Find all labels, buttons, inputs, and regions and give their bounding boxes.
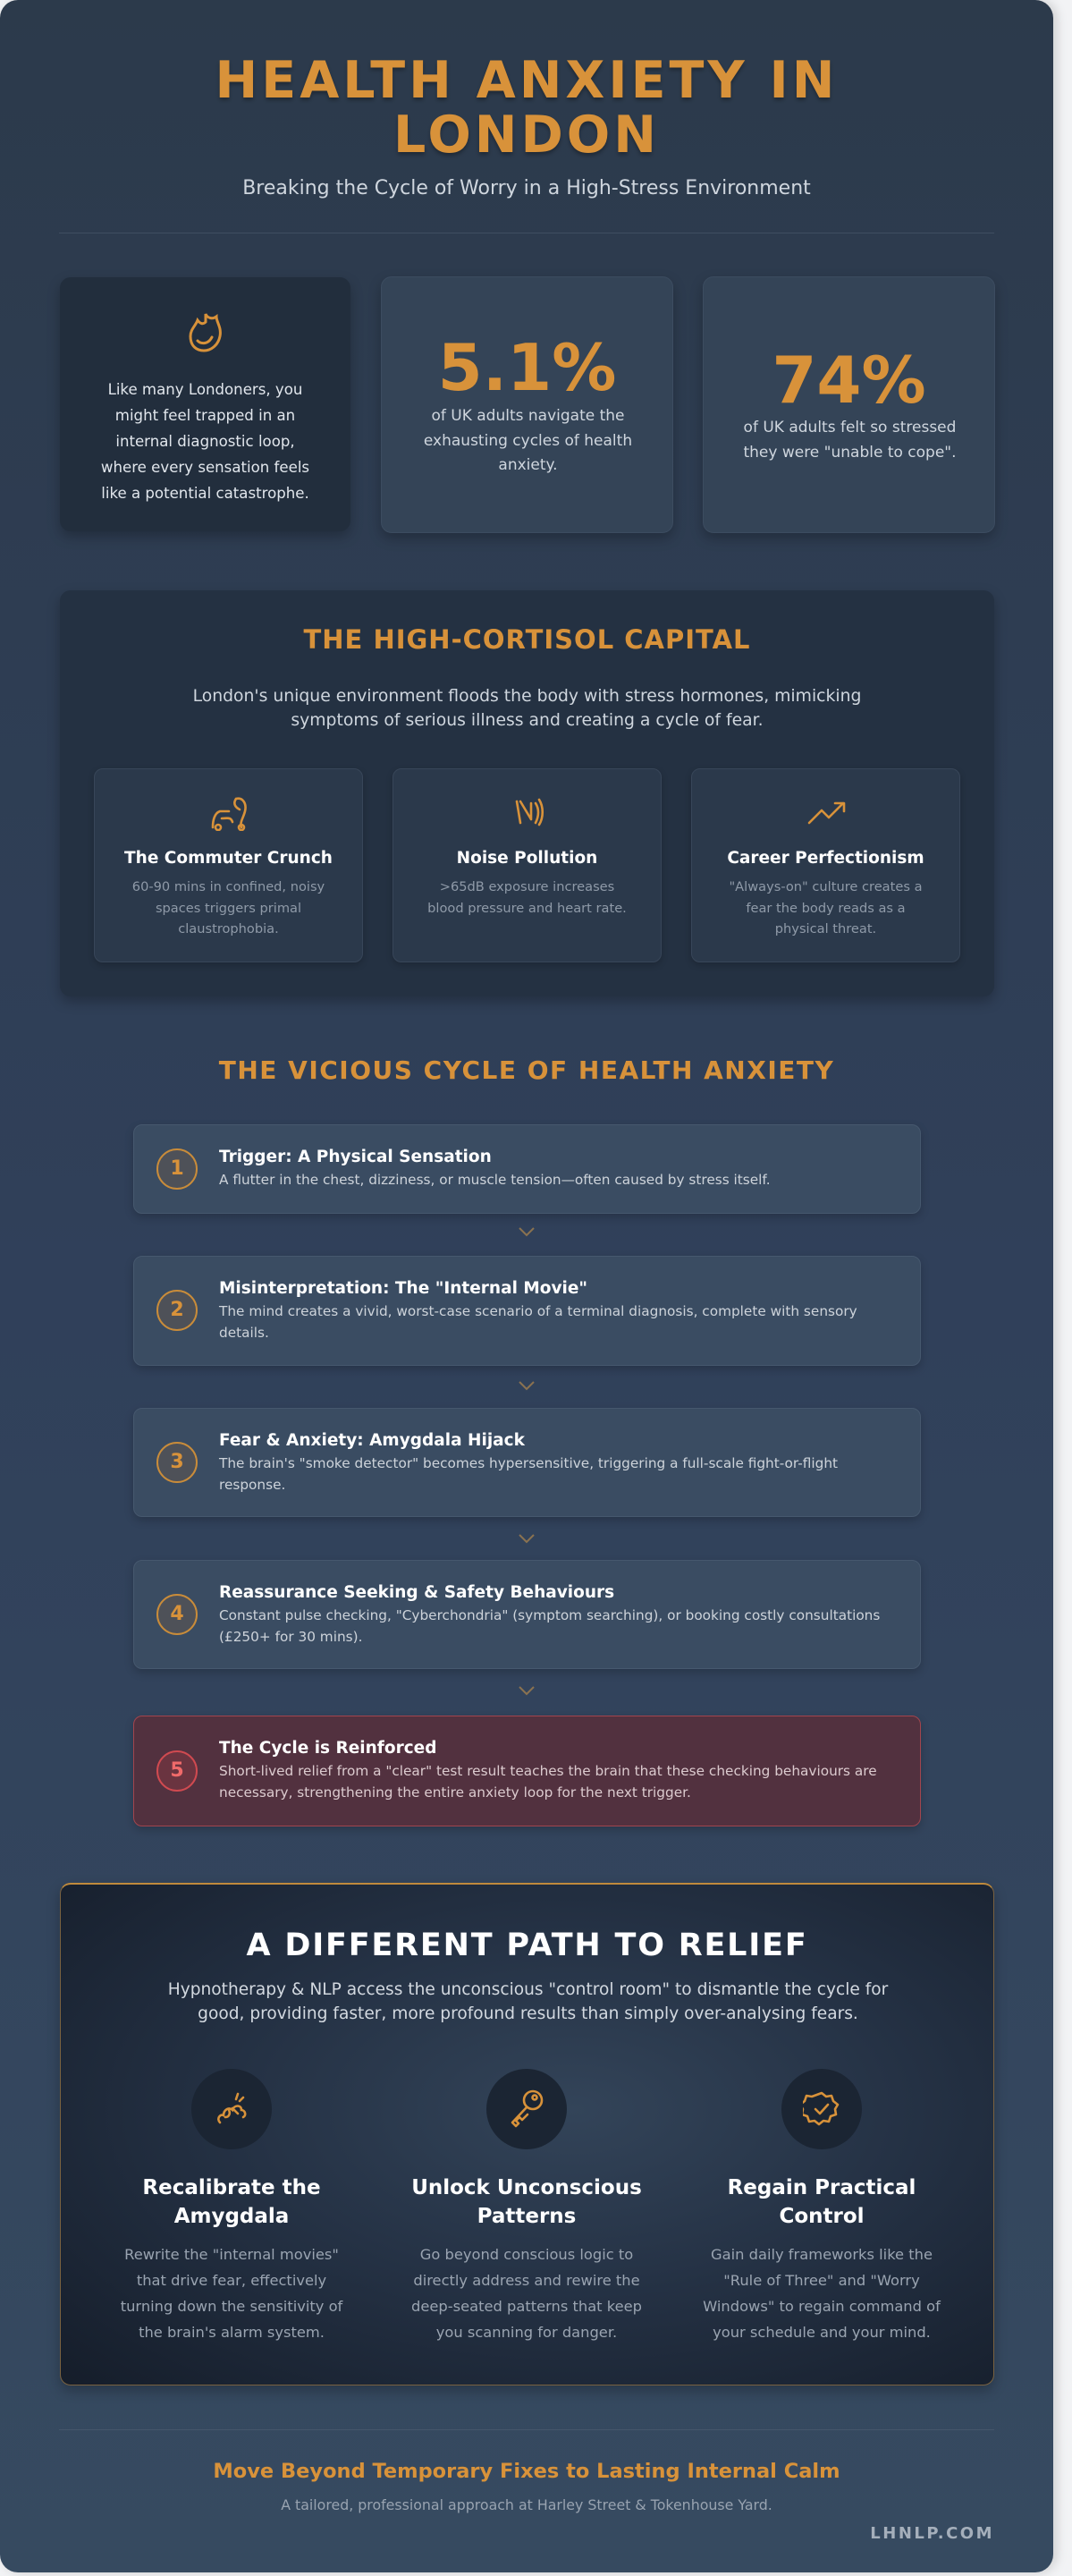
stat text: of UK adults navigate the exhausting cycles of health anxiety. [424, 407, 632, 474]
column: amygdala: Amygdala [174, 2205, 289, 2228]
step 3 [133, 1408, 921, 1517]
icon: noise [515, 798, 544, 826]
step 1: 1 [170, 1157, 184, 1180]
icon: trend [808, 801, 846, 825]
column: control: Gain daily frameworks like the [711, 2246, 933, 2263]
arrow [519, 1381, 535, 1390]
stat number: 74% [772, 343, 926, 418]
column: control [703, 2069, 941, 2341]
column: unlock: Unlock Unconscious [411, 2176, 642, 2199]
step 3: Fear & Anxiety: Amygdala Hijack [219, 1431, 525, 1450]
heading: vicious cycle: THE VICIOUS CYCLE OF HEALTH ANXIETY [219, 1055, 834, 1085]
column: control: Regain Practical [728, 2176, 916, 2199]
step 5: The Cycle is Reinforced [219, 1739, 436, 1758]
column: control: Windows" to regain command of [703, 2298, 941, 2315]
arrow [519, 1686, 535, 1696]
description: Hypnotherapy & NLP access the unconscious "control room" to dismantle the cycle for good, providing faster, more profound results than simply over-analysing fears. [168, 1980, 888, 2023]
title [215, 51, 838, 165]
description: London's unique environment floods the body with stress hormones, mimicking symptoms of serious illness and creating a cycle of fear. [193, 687, 861, 730]
stat card: 74% [703, 276, 995, 533]
subtitle: Breaking the Cycle of Worry in a High-Stress Environment [242, 177, 811, 199]
column: amygdala: Rewrite the "internal movies" [124, 2246, 339, 2263]
step 2: 2 [170, 1299, 184, 1321]
heading: THE HIGH-CORTISOL CAPITAL [303, 624, 751, 655]
intro text: Like many Londoners, you might feel trapped in an internal diagnostic loop, [108, 381, 302, 450]
step 3: The brain's "smoke detector" becomes hypersensitive, triggering a full-scale fight-or-flight response. [219, 1455, 838, 1492]
arrow [519, 1534, 535, 1544]
step 1 [133, 1124, 921, 1214]
stat card: intro [60, 277, 350, 531]
column: unlock: Go beyond conscious logic to [420, 2246, 633, 2263]
panel: different path to relief [60, 1883, 994, 2385]
icon: brain [191, 2069, 272, 2149]
column: amygdala: turning down the sensitivity of [121, 2298, 342, 2315]
column: unlock: you scanning for danger. [436, 2324, 617, 2341]
step 5 [133, 1716, 921, 1826]
title: LONDON [393, 106, 660, 165]
arrow [519, 1227, 535, 1236]
sub-card: noise [393, 768, 662, 962]
column: amygdala: that drive fear, effectively [137, 2272, 326, 2289]
sub-card: commuter: 60-90 mins in confined, noisy spaces triggers primal claustrophobia. [132, 879, 325, 936]
step 5: 5 [170, 1759, 184, 1782]
column: control: Control [779, 2205, 865, 2228]
column: amygdala [121, 2069, 343, 2341]
step 5: Short-lived relief from a "clear" test result teaches the brain that these checking behaviours are necessary, strengthening the entire anxiety loop for the next trigger. [219, 1763, 877, 1800]
sub-card: noise: >65dB exposure increases blood pressure and heart rate. [427, 879, 627, 916]
sub-card: career: Career Perfectionism [727, 849, 924, 868]
footer heading: Move Beyond Temporary Fixes to Lasting Internal Calm [213, 2460, 840, 2483]
stat number: 5.1% [438, 330, 616, 405]
intro text [101, 381, 309, 502]
column: unlock: directly address and rewire the [413, 2272, 640, 2289]
step 3: 3 [170, 1451, 184, 1473]
step 4: 4 [170, 1603, 184, 1625]
sub-card: commuter: The Commuter Crunch [124, 849, 333, 868]
sub-card: career: "Always-on" culture creates a fear the body reads as a physical threat. [729, 879, 923, 936]
icon: badge check [781, 2069, 862, 2149]
column: control: "Rule of Three" and "Worry [723, 2272, 920, 2289]
step 1: A flutter in the chest, dizziness, or muscle tension—often caused by stress itself. [219, 1172, 771, 1188]
heading: A DIFFERENT PATH TO RELIEF [246, 1928, 808, 1963]
column: unlock [411, 2069, 642, 2341]
column: amygdala: the brain's alarm system. [139, 2324, 325, 2341]
panel: high-cortisol capital [60, 590, 994, 996]
sub-card: career [691, 768, 960, 962]
step 1: Trigger: A Physical Sensation [219, 1148, 492, 1166]
sub-card: noise: Noise Pollution [457, 849, 597, 868]
stat card: 5.1% [381, 276, 673, 533]
step 2: Misinterpretation: The "Internal Movie" [219, 1279, 587, 1298]
stat text: of UK adults felt so stressed they were "unable to cope". [743, 419, 957, 462]
column: amygdala: Recalibrate the [142, 2176, 321, 2199]
title: HEALTH ANXIETY IN [215, 51, 838, 110]
icon: key [486, 2069, 567, 2149]
step 4: Constant pulse checking, "Cyberchondria" (symptom searching), or booking costly consultations (£250+ for 30 mins). [219, 1607, 880, 1644]
column: unlock: deep-seated patterns that keep [411, 2298, 642, 2315]
step 4 [133, 1560, 921, 1669]
footer brand: LHNLP.COM [870, 2524, 994, 2543]
column: unlock: Patterns [477, 2205, 576, 2228]
icon: commuter [211, 797, 247, 831]
step 2: The mind creates a vivid, worst-case scenario of a terminal diagnosis, complete with sensory details. [219, 1303, 857, 1340]
icon: flame loop [190, 313, 222, 352]
step 4: Reassurance Seeking & Safety Behaviours [219, 1583, 614, 1602]
column: control: your schedule and your mind. [713, 2324, 931, 2341]
intro text: where every sensation feels like a potential catastrophe. [101, 459, 309, 502]
sub-card: commuter [94, 768, 363, 962]
footer subtext: A tailored, professional approach at Harley Street & Tokenhouse Yard. [281, 2496, 772, 2513]
step 2 [133, 1256, 921, 1366]
